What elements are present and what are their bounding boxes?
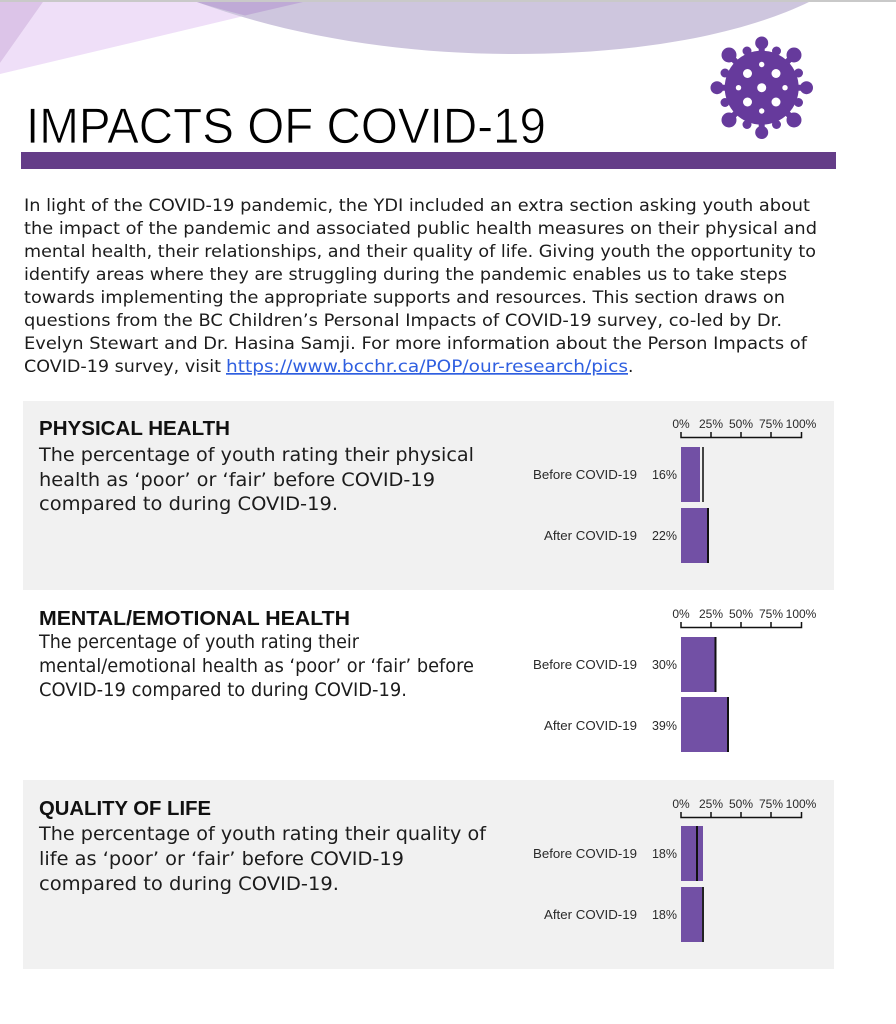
description: physical health: compared to during COVID-19. [39, 493, 338, 515]
bar chart: quality of life [533, 797, 817, 942]
bar chart: mental/emotional health: 25% [699, 607, 723, 621]
intro text block [24, 196, 817, 377]
panel: quality of life [23, 780, 834, 969]
heading: physical health: PHYSICAL HEALTH [39, 418, 230, 440]
description: quality of life: compared to during COVID-19. [39, 873, 339, 895]
icon: virus [710, 36, 813, 139]
bar chart: physical health: After COVID-19 [544, 528, 637, 543]
bar chart: physical health: Before COVID-19 [533, 467, 637, 482]
description: mental/emotional health: The percentage of youth rating their [38, 631, 359, 653]
bar chart: quality of life: After COVID-19 [544, 907, 637, 922]
bar chart: mental/emotional health: After COVID-19 [544, 718, 637, 733]
description: mental/emotional health [38, 631, 474, 701]
description: quality of life [38, 823, 487, 895]
bar chart: quality of life: 0% [672, 797, 690, 811]
bar chart: mental/emotional health: 39% [652, 719, 677, 733]
bar chart: quality of life: 18% [652, 847, 677, 861]
intro text block: identify areas where they are struggling during the pandemic enables us to take steps [24, 265, 787, 285]
description: physical health: The percentage of youth rating their physical [38, 444, 474, 466]
intro text block: In light of the COVID-19 pandemic, the YDI included an extra section asking youth about [24, 196, 810, 216]
bar chart: physical health: 16% [652, 468, 677, 482]
bar chart: physical health: 0% [672, 417, 690, 431]
bar chart: quality of life: 75% [759, 797, 783, 811]
heading: mental/emotional health: MENTAL/EMOTIONAL HEALTH [39, 608, 350, 630]
bar chart: mental/emotional health: 75% [759, 607, 783, 621]
bar chart: physical health: 50% [729, 417, 753, 431]
bar chart: physical health: 25% [699, 417, 723, 431]
description: quality of life: life as ‘poor’ or ‘fair’ before COVID-19 [39, 848, 404, 870]
intro text block: . [628, 357, 633, 377]
bar chart: quality of life: 100% [786, 797, 817, 811]
intro text block: Evelyn Stewart and Dr. Hasina Samji. For more information about the Person Impacts of [24, 334, 808, 354]
intro text block: COVID-19 survey, visit [24, 357, 221, 377]
bar chart: quality of life: Before COVID-19 [533, 846, 637, 861]
description: mental/emotional health: COVID-19 compared to during COVID-19. [39, 679, 407, 701]
title bar [21, 152, 836, 169]
description: quality of life: The percentage of youth rating their quality of [38, 823, 487, 845]
intro text block: https://www.bcchr.ca/POP/our-research/pics [226, 357, 628, 377]
bar chart: mental/emotional health: 50% [729, 607, 753, 621]
heading: quality of life: QUALITY OF LIFE [39, 798, 211, 820]
intro text block: mental health, their relationships, and their quality of life. Giving youth the opportunity to [24, 242, 816, 262]
title: IMPACTS OF COVID-19 [26, 98, 546, 154]
bar chart: mental/emotional health: 0% [672, 607, 690, 621]
description: physical health: health as ‘poor’ or ‘fair’ before COVID-19 [39, 469, 435, 491]
bar chart: mental/emotional health [533, 607, 817, 752]
panel: physical health [23, 401, 834, 590]
bar chart: physical health: 75% [759, 417, 783, 431]
bar chart: mental/emotional health: Before COVID-19 [533, 657, 637, 672]
description: physical health [38, 444, 474, 515]
bar chart: physical health [533, 417, 817, 563]
bar chart: physical health: 100% [786, 417, 817, 431]
bar chart: quality of life: 50% [729, 797, 753, 811]
bar chart: mental/emotional health: 100% [786, 607, 817, 621]
intro text block: towards implementing the appropriate supports and resources. This section draws on [24, 288, 785, 308]
bar chart: quality of life: 18% [652, 908, 677, 922]
intro text block: the impact of the pandemic and associated public health measures on their physical and [24, 219, 817, 239]
header decorative shapes [0, 0, 896, 74]
panel: mental/emotional health [38, 607, 817, 752]
intro text block: questions from the BC Children’s Personal Impacts of COVID-19 survey, co-led by Dr. [24, 311, 782, 331]
bar chart: mental/emotional health: 30% [652, 658, 677, 672]
bar chart: quality of life: 25% [699, 797, 723, 811]
bar chart: physical health: 22% [652, 529, 677, 543]
description: mental/emotional health: mental/emotional health as ‘poor’ or ‘fair’ before [39, 655, 474, 677]
